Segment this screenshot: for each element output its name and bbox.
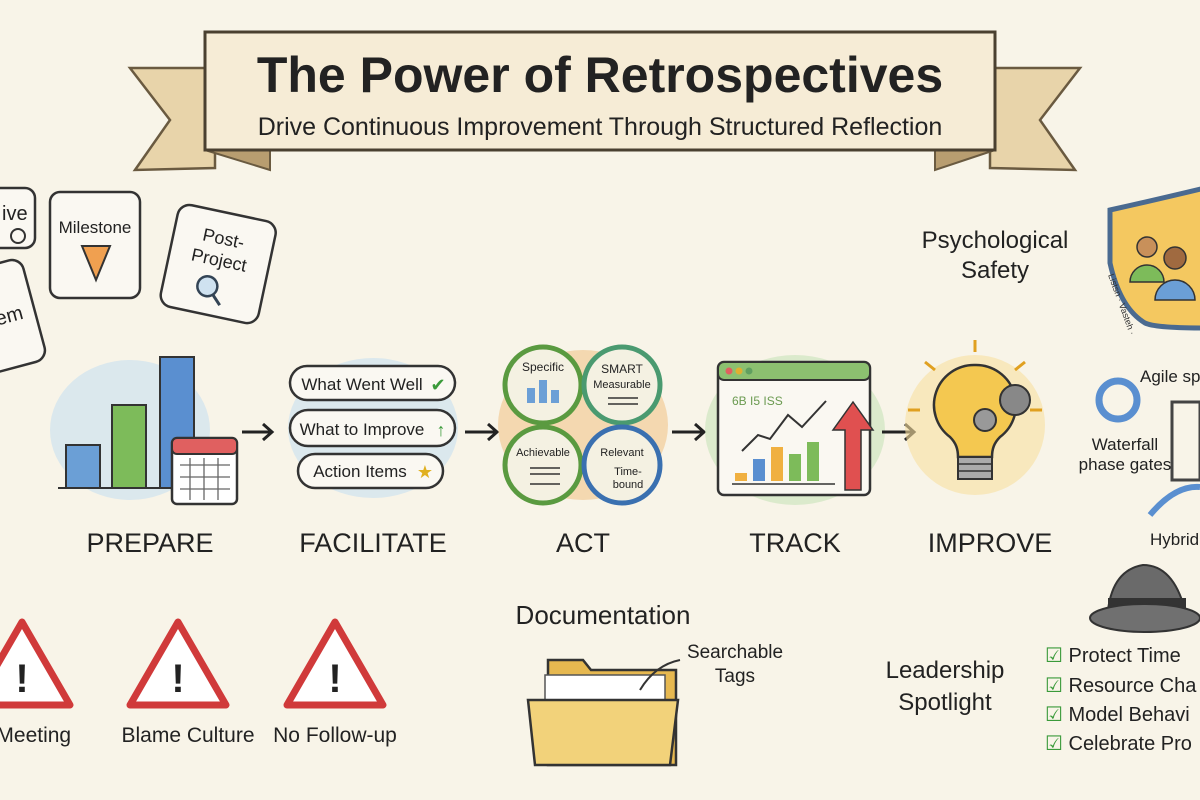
card: post-project: Project (190, 245, 249, 276)
step: facilitate: Action Items (313, 462, 407, 481)
warnings: No Follow-up (273, 724, 397, 747)
card: milestone (50, 192, 140, 298)
documentation: Documentation (516, 600, 690, 630)
step: act SMART: Specific (522, 360, 564, 374)
leadership spotlight (886, 657, 1004, 716)
psychological safety heading: Safety (961, 257, 1029, 284)
step: prepare: PREPARE (86, 528, 214, 558)
leadership spotlight: Leadership (886, 657, 1004, 684)
step: track: 6B I5 ISS (732, 394, 783, 408)
methodologies: Hybrid (1150, 530, 1199, 549)
step: facilitate: FACILITATE (299, 528, 447, 558)
icon: shield (1106, 188, 1200, 336)
step: facilitate: ✔ (430, 375, 446, 395)
methodologies: phase gates (1079, 455, 1171, 474)
title: The Power of Retrospectives (257, 47, 943, 103)
step: track (705, 355, 885, 558)
card: post-project: Post- (201, 224, 246, 253)
arrow (882, 424, 914, 440)
card: system partial (0, 257, 48, 378)
card: retrospective partial: ive (2, 203, 28, 225)
psychological safety heading (922, 227, 1068, 284)
step: facilitate: ↑ (436, 420, 446, 440)
step: facilitate: What to Improve (300, 420, 424, 439)
icon: calendar (172, 438, 237, 504)
warnings: ! (171, 657, 185, 701)
step: act SMART: ACT (556, 528, 610, 558)
checklist: ☑ Model Behavi (1045, 704, 1190, 726)
documentation: Tags (715, 666, 755, 687)
warnings (0, 622, 397, 747)
warnings: Blame Culture (121, 724, 255, 747)
checklist (1045, 645, 1197, 755)
step: track: TRACK (749, 528, 841, 558)
subtitle: Drive Continuous Improvement Through Structured Reflection (258, 113, 942, 141)
checklist: ☑ Celebrate Pro (1045, 733, 1192, 755)
warnings: ! (328, 657, 342, 701)
step: act SMART: Achievable (516, 447, 570, 459)
warnings: ! (15, 657, 29, 701)
step: act SMART: bound (613, 479, 643, 491)
documentation: Searchable (687, 642, 783, 663)
checklist: ☑ Protect Time (1045, 645, 1181, 667)
card: milestone: Milestone (59, 218, 131, 237)
card: post-project (158, 203, 278, 325)
step: facilitate: ★ (417, 462, 433, 482)
banner (130, 32, 1080, 170)
psychological safety heading: Psychological (922, 227, 1068, 254)
checklist: ☑ Resource Cha (1045, 675, 1197, 697)
methodologies: Waterfall (1092, 435, 1158, 454)
documentation (516, 600, 783, 765)
step: improve (905, 340, 1052, 558)
arrow (465, 424, 497, 440)
step: facilitate: What Went Well (301, 375, 423, 394)
step: facilitate (288, 358, 458, 558)
step: act SMART: Time- (614, 466, 642, 478)
icon: shield: Listsn · Vasteh · (1106, 272, 1138, 336)
arrow (672, 424, 704, 440)
leadership spotlight: Spotlight (898, 689, 992, 716)
step: act SMART: Relevant (600, 447, 644, 459)
arrow (242, 424, 272, 440)
icon: hat (1090, 565, 1200, 632)
card: retrospective partial (0, 188, 35, 248)
step: act SMART: Measurable (593, 379, 651, 391)
step: act SMART: SMART (601, 362, 644, 376)
step: improve: IMPROVE (928, 528, 1052, 558)
step: act SMART (498, 347, 668, 558)
methodologies (1079, 367, 1200, 549)
step: prepare (50, 357, 237, 558)
